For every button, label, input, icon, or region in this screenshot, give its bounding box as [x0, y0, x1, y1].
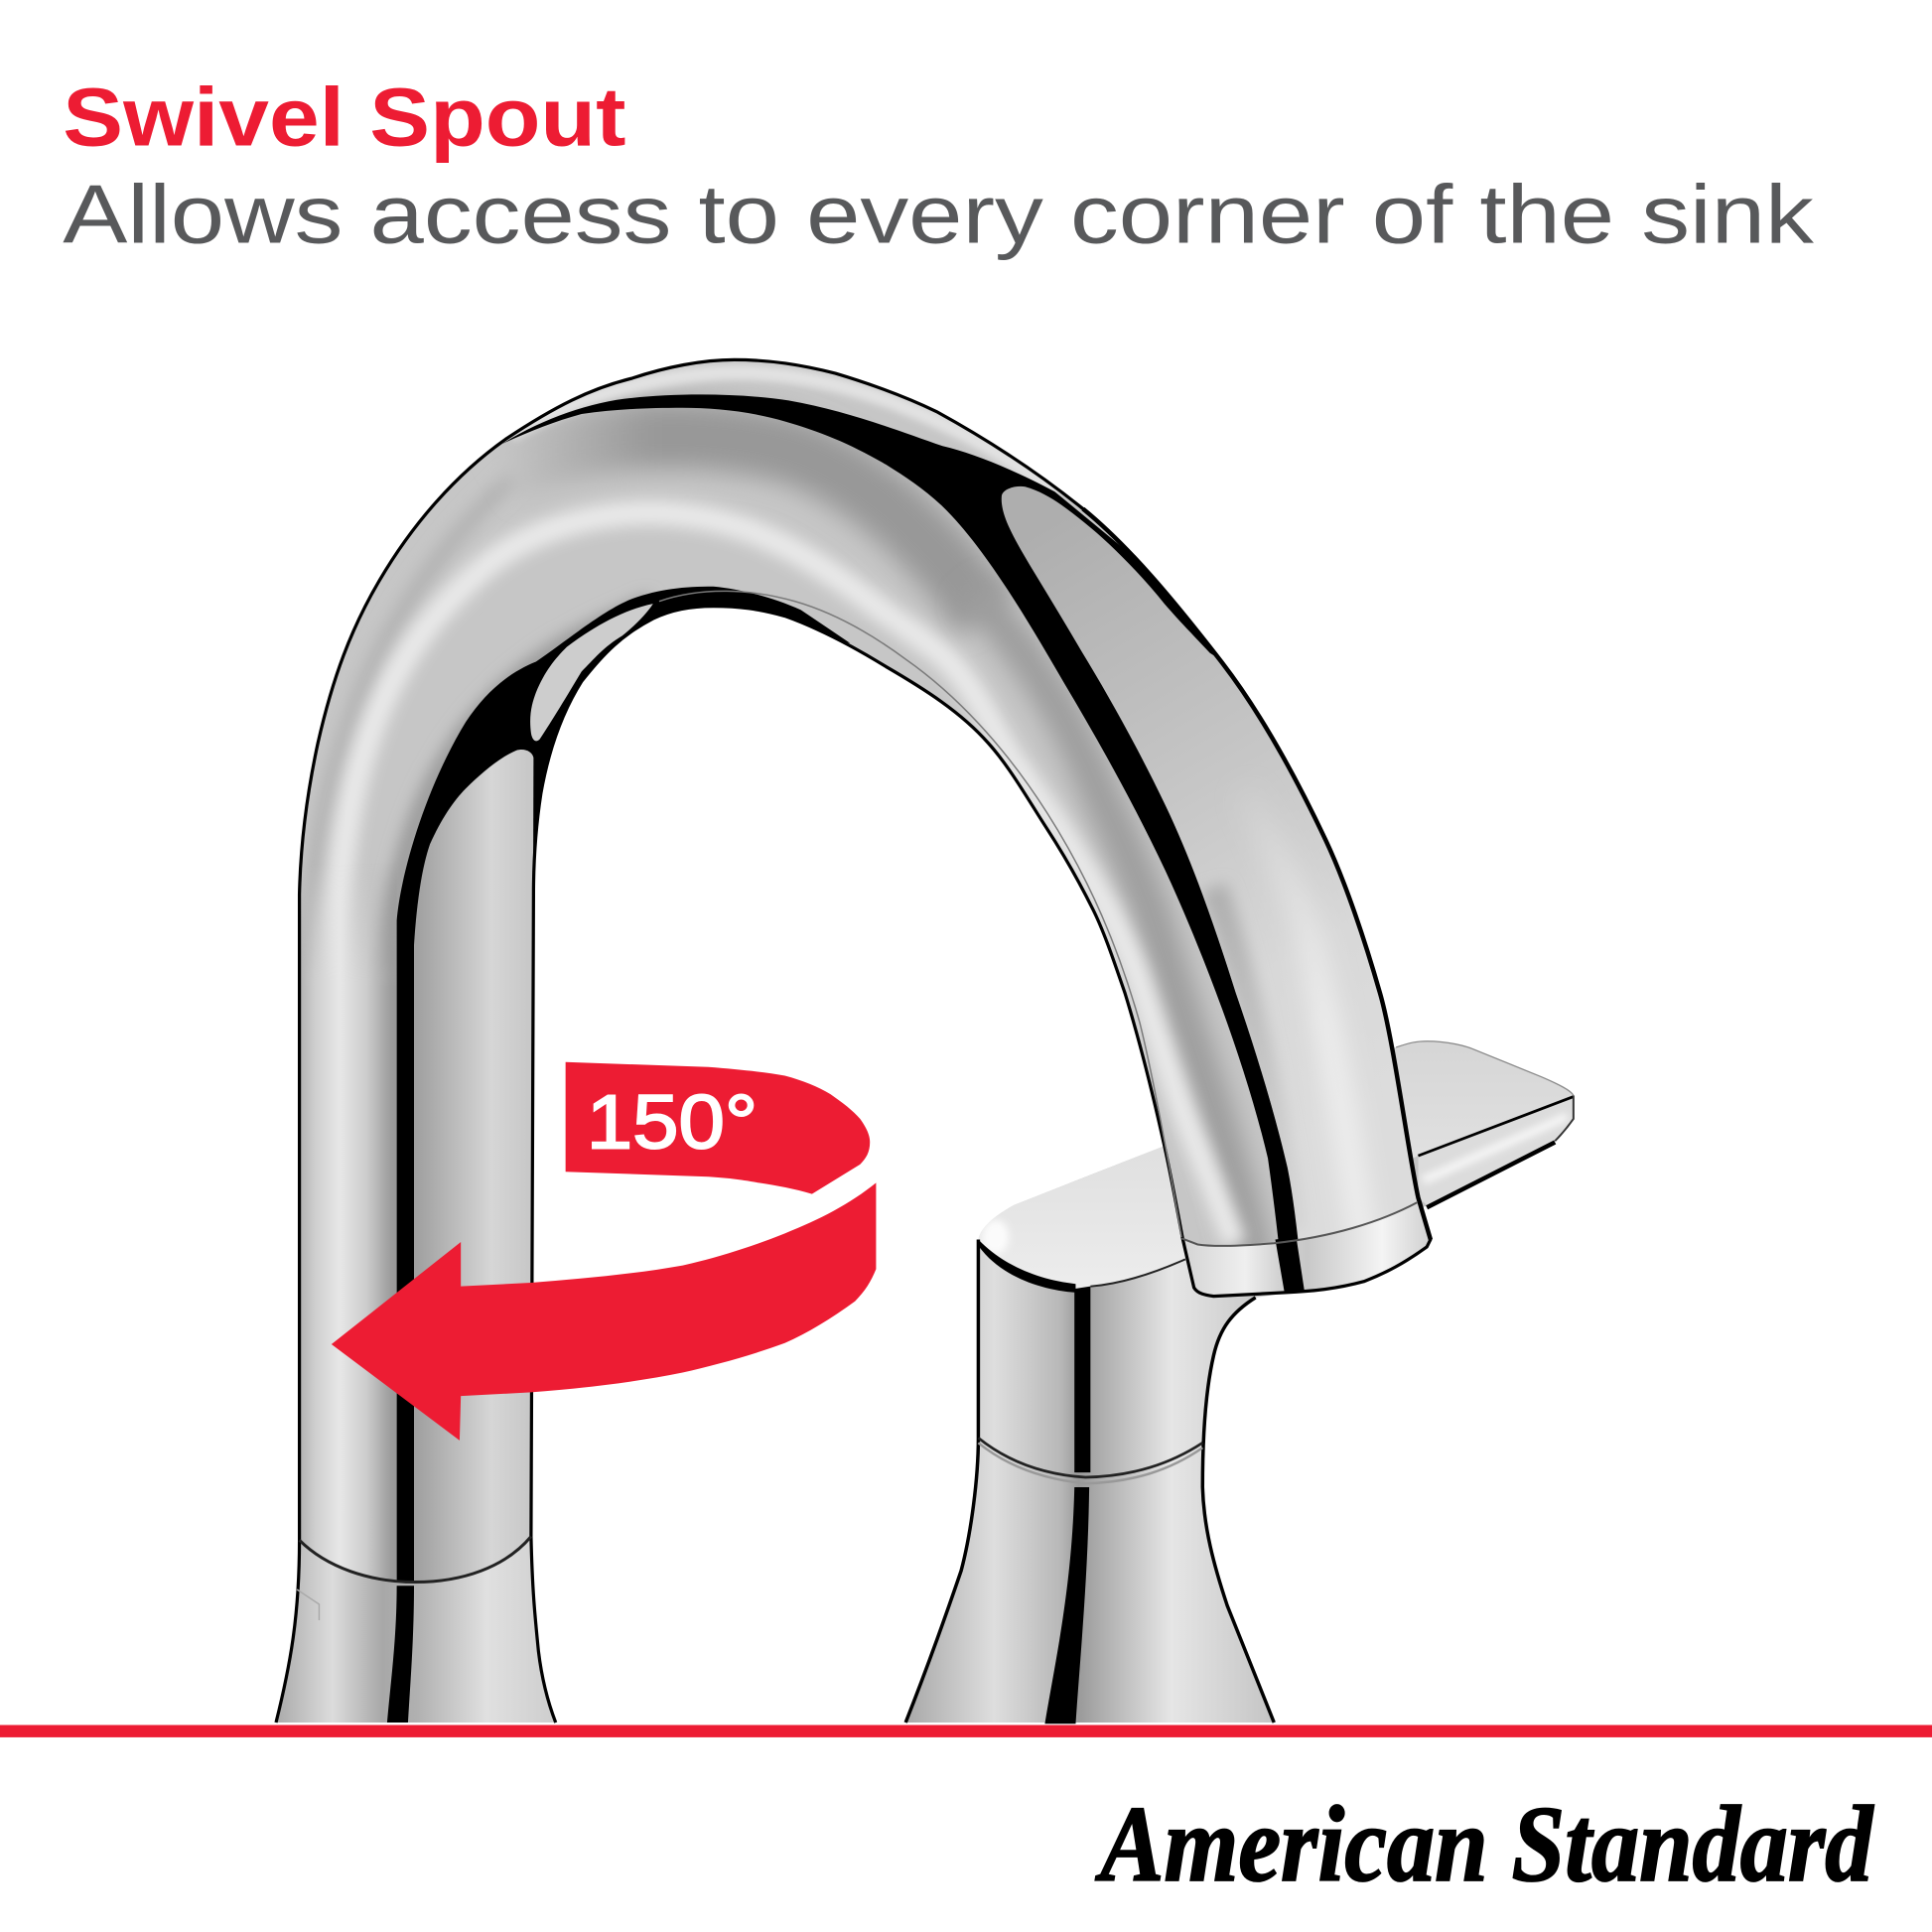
lever top edge [1396, 1041, 1574, 1095]
arrow upper band [566, 1062, 870, 1194]
top rim highlight [511, 372, 1054, 492]
handle collar lower line [978, 1443, 1202, 1483]
lever lower shadow [1427, 1142, 1555, 1207]
ring seam [1181, 1202, 1417, 1246]
post collar ring [300, 1537, 531, 1583]
post small tick [297, 1589, 319, 1620]
spout right edge thickening [1083, 509, 1431, 1240]
subheading: sink access description: Allows access to every corner of the sink [63, 168, 1814, 260]
handle and lever [905, 1041, 1574, 1724]
inner reflection blob [530, 604, 653, 741]
post right face [414, 750, 533, 1589]
handle dark outlines [905, 1240, 1274, 1723]
spout silhouette fill [276, 359, 1431, 1723]
panel highlight [1279, 865, 1374, 1229]
red counter line [0, 1725, 1932, 1737]
spout stripe over ring [1275, 1239, 1305, 1291]
chrome shading clipped to spout [271, 372, 1553, 1725]
handle stripe lower [1044, 1487, 1089, 1724]
handle collar ring [978, 1438, 1202, 1477]
panel base [1001, 486, 1418, 1239]
base flare below collar [271, 1537, 561, 1725]
lever top surface [978, 1041, 1574, 1289]
lever underside line right [1090, 1259, 1185, 1287]
faucet illustration [271, 359, 1574, 1725]
top black reflection [502, 394, 1299, 1239]
handle body [905, 1041, 1574, 1723]
right spout panel [1001, 486, 1418, 1239]
rotation arrow [332, 1062, 876, 1441]
lever front edge [1418, 1097, 1574, 1205]
spout outline [276, 359, 1431, 1723]
handle stripe upper [1074, 1287, 1090, 1472]
inner gray band [389, 604, 653, 973]
lever outlines [1418, 1097, 1574, 1156]
arch outer edge shade [304, 480, 510, 915]
angle label: 150° [587, 1080, 758, 1166]
arch highlight [337, 513, 1235, 1244]
lever tip edge [1555, 1095, 1574, 1141]
heading: Swivel Spout: Swivel Spout [63, 70, 625, 163]
arrow lower band and head [332, 1182, 876, 1441]
post inner black reflection [397, 587, 850, 1589]
post left face [301, 919, 397, 1581]
lever underside shadow left [978, 1240, 1075, 1293]
arch gray band lower [973, 592, 1257, 1269]
inner seam lines [659, 591, 1181, 1237]
post lower stripe [387, 1586, 414, 1725]
lever highlight [982, 1220, 1009, 1254]
arch gray band top [505, 435, 986, 617]
lever front edge highlight [1423, 1116, 1568, 1180]
spout ring [1185, 1211, 1428, 1295]
swivel spout and post [271, 359, 1553, 1725]
panel lower gray [1213, 888, 1294, 1232]
